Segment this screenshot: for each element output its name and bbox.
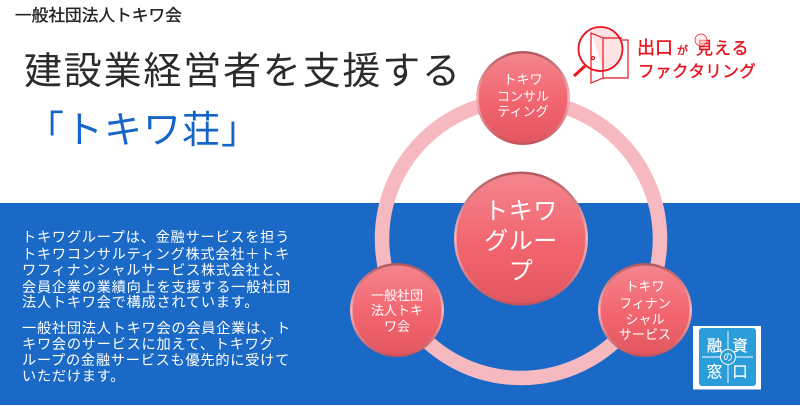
right circle: トキワフィナンシャルサービス: トキワ bbox=[625, 279, 665, 294]
right circle: トキワフィナンシャルサービス: サービス bbox=[619, 327, 671, 342]
centre circle: トキワグループ bbox=[454, 172, 588, 306]
description text: トキワグループは、金融サービスを担う bbox=[22, 230, 290, 246]
right circle: トキワフィナンシャルサービス bbox=[598, 263, 692, 357]
top circle: トキワコンサルティング bbox=[476, 51, 570, 145]
description text: ワフィナンシャルサービス株式会社と、 bbox=[22, 263, 290, 279]
left circle: 一般社団法人トキワ会 bbox=[350, 263, 444, 357]
description text: ループの金融サービスも優先的に受けて bbox=[22, 353, 290, 369]
blue background band bbox=[0, 203, 800, 405]
top circle: トキワコンサルティング: トキワ bbox=[503, 72, 543, 87]
organisation name: 一般社団法人トキワ会 bbox=[15, 6, 182, 25]
badge: 融資の窓口 bbox=[693, 326, 761, 390]
top circle: トキワコンサルティング: コンサル bbox=[497, 89, 549, 104]
logo text: 見える bbox=[696, 39, 750, 58]
left circle: 一般社団法人トキワ会: 一般社団 bbox=[371, 288, 423, 303]
description text: 法人トキワ会で構成されています。 bbox=[22, 295, 259, 311]
centre circle: トキワグループ: グルー bbox=[484, 228, 558, 255]
title: 建設業経営者を支援する bbox=[24, 51, 462, 93]
badge: 融資の窓口: の bbox=[723, 352, 733, 364]
logo: 出口が見えるファクタリング bbox=[574, 22, 756, 83]
description text: キワ会のサービスに加えて、トキワグ bbox=[22, 337, 275, 353]
left circle: 一般社団法人トキワ会: ワ会 bbox=[384, 319, 410, 334]
badge: 融資の窓口: 窓 bbox=[707, 363, 722, 381]
centre circle: トキワグループ: トキワ bbox=[484, 198, 558, 225]
logo text bbox=[637, 38, 756, 81]
right circle: トキワフィナンシャルサービス: フィナン bbox=[619, 296, 671, 311]
ring connecting the group companies bbox=[382, 100, 660, 378]
logo text: 出口 bbox=[637, 38, 673, 58]
centre circle: トキワグループ: プ bbox=[509, 258, 533, 285]
description text: トキワコンサルティング株式会社＋トキ bbox=[22, 247, 290, 263]
description text: 会員企業の業績向上を支援する一般社団 bbox=[22, 280, 291, 296]
badge: 融資の窓口: 口 bbox=[732, 364, 748, 381]
logo text: が bbox=[677, 43, 688, 57]
left circle: 一般社団法人トキワ会: 法人トキ bbox=[371, 303, 423, 318]
description text: いただけます。 bbox=[22, 369, 125, 385]
lens highlight on 見 bbox=[695, 34, 707, 46]
badge: 融資の窓口: 融 bbox=[707, 337, 722, 355]
badge: 融資の窓口: 資 bbox=[732, 337, 748, 355]
icon: door and magnifier bbox=[574, 22, 628, 83]
description text bbox=[22, 230, 291, 385]
logo text: ファクタリング bbox=[638, 62, 756, 81]
top circle: トキワコンサルティング: ティング bbox=[497, 104, 549, 119]
description text: 一般社団法人トキワ会の会員企業は、ト bbox=[22, 321, 291, 337]
right circle: トキワフィナンシャルサービス: シャル bbox=[625, 312, 665, 327]
subtitle: 「トキワ荘」 bbox=[26, 110, 260, 152]
